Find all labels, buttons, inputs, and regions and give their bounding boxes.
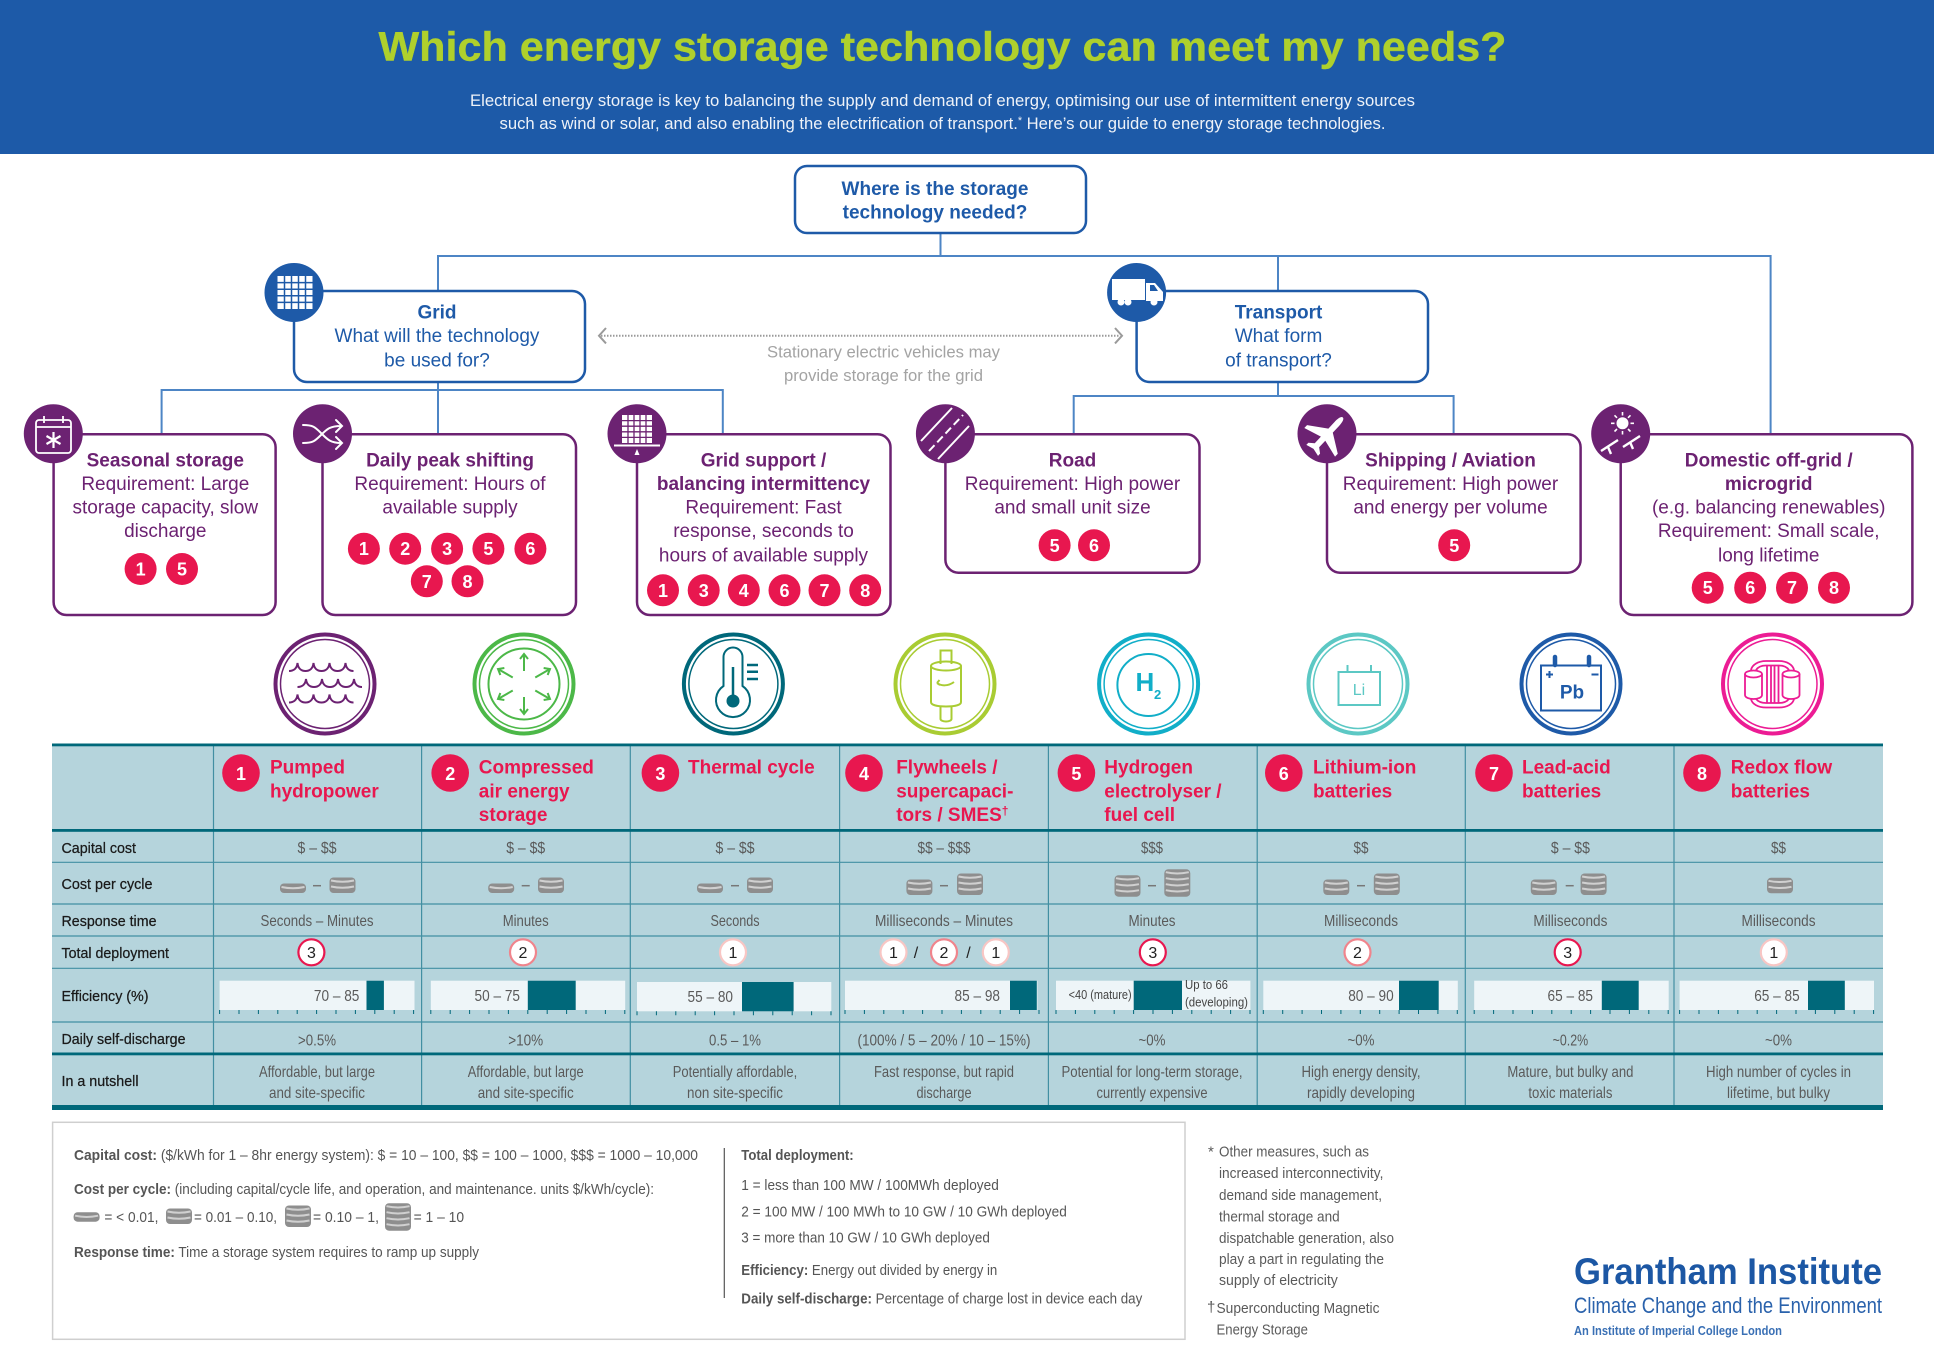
logo: Grantham Institute: Grantham Institute (1574, 1251, 1882, 1292)
row: total deployment: 2 (940, 945, 949, 962)
icon: compressed air arrows (474, 634, 574, 734)
row: in a nutshell: toxic materials (1528, 1085, 1612, 1102)
column headers: Lithium-ion (1313, 758, 1416, 778)
technology badges (1039, 529, 1110, 561)
note: stationary vehicles: Stationary electric vehicles may (767, 342, 1000, 362)
panel: grid question (264, 263, 585, 382)
technology badges: 1 (359, 539, 369, 559)
panel: daily peak shifting: Requirement: Hours of (354, 474, 546, 495)
icon: calendar snowflake (24, 404, 83, 463)
panel: grid support: Requirement: Fast (685, 498, 842, 518)
technology badges (348, 533, 546, 597)
panel: legend (53, 1122, 1185, 1339)
row labels: Cost per cycle (62, 876, 152, 893)
row: in a nutshell: Fast response, but rapid (874, 1064, 1014, 1081)
row: total deployment: / (914, 945, 919, 962)
row labels: Daily self-discharge (62, 1031, 186, 1048)
technology badge: 5 (1449, 536, 1459, 556)
row: efficiency bars: 65 – 85 (1754, 988, 1800, 1005)
row: in a nutshell: lifetime, but bulky (1727, 1085, 1830, 1102)
panel: shipping and aviation: Shipping / Aviation (1365, 450, 1536, 472)
column headers: tors / SMES (896, 805, 1002, 826)
row: capital cost: $ – $$ (298, 840, 337, 857)
panel: road: Road (1049, 450, 1096, 472)
panel: grid support: response, seconds to (673, 521, 854, 542)
row: daily self-discharge: (100% / 5 – 20% / 10 – 15%) (858, 1032, 1030, 1050)
panel: road: and small unit size (994, 498, 1151, 518)
footnotes (1207, 1144, 1394, 1338)
row: response time: Seconds – Minutes (260, 913, 374, 930)
footnotes: dispatchable generation, also (1219, 1230, 1394, 1247)
row: capital cost: $$ (1771, 840, 1786, 857)
column headers: batteries (1522, 782, 1601, 802)
legend: coin scale: = 1 – 10 (414, 1209, 464, 1226)
technology badges: 8 (462, 572, 473, 592)
column headers: Compressed (479, 758, 594, 778)
legend: coin scale: = 0.01 – 0.10, (194, 1209, 277, 1226)
row: in a nutshell: Mature, but bulky and (1507, 1064, 1633, 1081)
technology badges: 4 (739, 581, 749, 601)
legend: total deployment (741, 1147, 1067, 1247)
row labels: Capital cost (62, 840, 137, 857)
column headers: 3 (655, 764, 665, 784)
legend: total deployment: 2 = 100 MW / 100 MWh to 10 GW / 10 GWh deployed (741, 1204, 1067, 1221)
row: in a nutshell: currently expensive (1096, 1085, 1208, 1102)
legend: coin scale: = 0.10 – 1, (313, 1209, 379, 1226)
row: daily self-discharge: >10% (508, 1032, 543, 1050)
row: in a nutshell (259, 1064, 1851, 1102)
panel: road (916, 404, 1200, 573)
row: in a nutshell: Potential for long-term storage, (1062, 1064, 1242, 1081)
row: efficiency bars: Up to 66 (1185, 978, 1228, 992)
column headers: Lead-acid (1522, 758, 1611, 778)
column headers: hydropower (270, 782, 379, 802)
row: response time: Milliseconds – Minutes (875, 913, 1013, 930)
row: capital cost: $ – $$ (1551, 840, 1590, 857)
column headers: 1 (236, 764, 246, 784)
icon: pumped hydropower waves (276, 634, 374, 734)
panel: seasonal storage (24, 404, 276, 615)
icon: thermal thermometer (684, 634, 783, 734)
row: efficiency bars: 50 – 75 (474, 988, 520, 1005)
footnotes: Other measures, such as (1219, 1144, 1369, 1160)
column headers: 7 (1489, 764, 1499, 784)
logo: Grantham Institute: An Institute of Imperial College London (1574, 1324, 1782, 1338)
row: capital cost (298, 840, 1786, 857)
legend: total deployment: Total deployment: (741, 1147, 854, 1164)
icon: hydrogen: H (1136, 667, 1154, 697)
column headers: Redox flow (1731, 758, 1832, 778)
technology badges: 2 (400, 539, 410, 559)
column headers (222, 754, 1832, 826)
column headers: air energy (479, 782, 570, 802)
row: in a nutshell: rapidly developing (1307, 1085, 1415, 1102)
column headers: Pumped (270, 758, 345, 778)
footnotes: play a part in regulating the (1219, 1251, 1384, 1268)
row: in a nutshell: discharge (916, 1085, 972, 1102)
arrow: stationary electric vehicles (599, 328, 1122, 385)
icon: sun and solar panels (1591, 404, 1650, 463)
panel: seasonal storage: Seasonal storage (87, 450, 244, 472)
legend: daily self-discharge: Daily self-discharge: Percentage of charge lost in device each day (741, 1290, 1143, 1307)
note: stationary vehicles: provide storage for the grid (784, 366, 983, 385)
intro text: Here’s our guide to energy storage technologies. (1022, 114, 1386, 133)
technology badges: 3 (699, 581, 709, 601)
connector lines (162, 233, 1771, 434)
row: total deployment: 1 (991, 945, 1000, 962)
panel: grid support: hours of available supply (659, 546, 869, 566)
row: total deployment: 1 (729, 945, 738, 962)
technology badges: 7 (819, 581, 830, 601)
row: total deployment: 2 (519, 945, 528, 962)
row: capital cost: $$ (1354, 840, 1369, 857)
panel: domestic off-grid: Requirement: Small scale, (1658, 521, 1880, 542)
row: efficiency bars: 80 – 90 (1348, 988, 1394, 1005)
logo: Grantham Institute (1574, 1251, 1882, 1338)
row: total deployment (298, 939, 1787, 965)
comparison table (52, 744, 1883, 1110)
row: efficiency bars: 85 – 98 (954, 988, 1000, 1005)
row labels: Response time (62, 913, 156, 930)
technology badges: 5 (483, 539, 493, 559)
technology badges: 6 (779, 581, 790, 601)
icon: flywheel (896, 634, 994, 734)
panel: domestic off-grid: microgrid (1725, 474, 1813, 495)
column headers: 8 (1697, 764, 1707, 784)
technology badges: 6 (525, 539, 535, 559)
row labels (62, 840, 186, 1090)
column headers: electrolyser / (1104, 782, 1222, 802)
row: in a nutshell: Affordable, but large (259, 1064, 375, 1081)
technology badges (647, 574, 881, 606)
icon: hydrogen (1099, 634, 1198, 734)
row: capital cost: $$ – $$$ (918, 840, 971, 857)
row: total deployment: 3 (307, 945, 316, 962)
technology badges: 5 (177, 560, 187, 580)
icon: hydrogen: 2 (1154, 687, 1161, 702)
technology badges: 1 (658, 581, 668, 601)
panel: domestic off-grid: Domestic off-grid / (1685, 450, 1853, 472)
row labels: Total deployment (62, 945, 170, 962)
technology badges: 1 (136, 560, 146, 580)
column headers: storage (479, 805, 547, 826)
column headers: † (1002, 804, 1008, 818)
panel: seasonal storage: storage capacity, slow (73, 498, 258, 518)
intro text: Electrical energy storage is key to balancing the supply and demand of energy, optimising our use of intermittent energy sources (470, 91, 1415, 110)
panel: shipping and aviation: Requirement: High power (1343, 474, 1559, 495)
row: in a nutshell: non site-specific (687, 1085, 783, 1102)
column headers: 6 (1279, 764, 1289, 784)
technology badges: 7 (422, 572, 432, 592)
panel: grid support: balancing intermittency (657, 474, 871, 495)
intro text: * (1018, 115, 1023, 127)
row: daily self-discharge: ~0.2% (1553, 1032, 1588, 1050)
column headers: 2 (445, 764, 455, 784)
note: stationary vehicles (767, 342, 1000, 385)
technology badges: 8 (1829, 578, 1839, 598)
row: daily self-discharge: 0.5 – 1% (709, 1032, 761, 1050)
panel: transport question: What form (1235, 326, 1322, 347)
row: total deployment: 3 (1148, 945, 1157, 962)
footnotes: thermal storage and (1219, 1208, 1340, 1226)
footnotes: * (1208, 1144, 1214, 1160)
column headers: batteries (1313, 782, 1392, 802)
row: efficiency bars: 70 – 85 (314, 988, 359, 1005)
row: response time (260, 913, 1816, 930)
row: efficiency bars (220, 978, 1874, 1015)
row: daily self-discharge (298, 1032, 1792, 1050)
panel: domestic off-grid: (e.g. balancing renewables) (1652, 498, 1885, 518)
footnotes: increased interconnectivity, (1219, 1165, 1383, 1182)
row: response time: Minutes (1128, 913, 1176, 930)
legend: coin scale (74, 1203, 464, 1231)
technology badge (1438, 529, 1470, 561)
row: efficiency bars: <40 (mature) (1069, 988, 1132, 1002)
column headers: Thermal cycle (688, 758, 815, 778)
row: total deployment: 3 (1563, 945, 1572, 962)
panel: seasonal storage: Requirement: Large (81, 474, 249, 495)
row: in a nutshell: High number of cycles in (1706, 1064, 1851, 1081)
icon: lithium-ion battery: Li (1353, 682, 1365, 699)
panel: transport question: Transport (1235, 302, 1323, 324)
logo: Grantham Institute: Climate Change and the Environment (1574, 1293, 1882, 1318)
icon: grid (264, 263, 324, 322)
technology badges (1692, 572, 1850, 604)
legend: efficiency: Efficiency: Energy out divided by energy in (741, 1262, 997, 1279)
technology badges: 7 (1787, 578, 1797, 598)
technology badges: 8 (860, 581, 870, 601)
row labels: In a nutshell (62, 1073, 138, 1090)
row: response time: Minutes (503, 913, 549, 930)
row: efficiency bars: 55 – 80 (688, 989, 733, 1006)
row: in a nutshell: and site-specific (269, 1085, 365, 1102)
legend: capital cost: Capital cost: ($/kWh for 1 – 8hr energy system): $ = 10 – 100, $$ = 100 – 1000, $$$ = 1000 – 10,000 (74, 1147, 698, 1164)
panel: seasonal storage: discharge (124, 521, 206, 542)
technology badges (125, 553, 198, 585)
icon: lithium-ion battery (1308, 634, 1408, 734)
row: response time: Milliseconds (1324, 913, 1398, 930)
technology badges: 5 (1703, 578, 1713, 598)
panel: daily peak shifting: available supply (382, 498, 518, 518)
icon: lead-acid battery: Pb (1560, 682, 1584, 704)
technology badges: 3 (442, 539, 452, 559)
icon: lead-acid battery (1522, 634, 1620, 734)
row: daily self-discharge: ~0% (1765, 1032, 1792, 1050)
icon: redox flow (1723, 634, 1822, 734)
row: in a nutshell: High energy density, (1302, 1064, 1420, 1081)
row: capital cost: $ – $$ (716, 840, 755, 857)
question box: where needed: technology needed? (843, 202, 1027, 224)
panel: transport question: of transport? (1225, 350, 1332, 372)
panel: grid question: What will the technology (335, 326, 540, 347)
footnotes: † (1207, 1299, 1215, 1316)
footnotes: Energy Storage (1216, 1322, 1308, 1338)
column headers: 4 (859, 764, 869, 784)
legend: total deployment: 3 = more than 10 GW / 10 GWh deployed (741, 1230, 990, 1247)
question box: where needed: Where is the storage (842, 179, 1028, 200)
column headers: fuel cell (1104, 805, 1175, 826)
panel: grid question: Grid (417, 302, 457, 324)
row: response time: Milliseconds (1533, 913, 1607, 930)
row: efficiency bars: 65 – 85 (1548, 988, 1593, 1005)
row: capital cost: $$$ (1141, 840, 1163, 857)
panel: domestic off-grid: long lifetime (1718, 546, 1819, 566)
column headers: supercapaci- (896, 782, 1013, 802)
row: efficiency bars: (developing) (1185, 996, 1248, 1010)
row: total deployment: 2 (1353, 945, 1362, 962)
technology badges: 5 (1050, 536, 1060, 556)
column headers: batteries (1731, 782, 1810, 802)
intro text (470, 91, 1415, 133)
footnotes: demand side management, (1219, 1187, 1382, 1204)
panel: grid support: Grid support / (701, 450, 827, 472)
icon: road (916, 404, 975, 463)
title: Which energy storage technology can meet my needs? (378, 24, 1506, 70)
row: total deployment: / (966, 945, 971, 962)
column headers: Hydrogen (1104, 758, 1193, 778)
technology badges: 6 (1745, 578, 1755, 598)
panel: road: Requirement: High power (965, 474, 1181, 495)
technology badges: 6 (1089, 536, 1099, 556)
panel: grid support (608, 404, 890, 615)
panel: domestic off-grid (1591, 404, 1912, 615)
row: daily self-discharge: >0.5% (298, 1032, 336, 1050)
column headers: Flywheels / (896, 758, 998, 778)
header banner (0, 0, 1934, 154)
icon: plane (1297, 403, 1358, 465)
footnotes: supply of electricity (1219, 1272, 1338, 1289)
column headers: 5 (1071, 764, 1081, 784)
panel: shipping and aviation (1297, 403, 1581, 573)
row: daily self-discharge: ~0% (1348, 1032, 1374, 1050)
row: capital cost: $ – $$ (506, 840, 545, 857)
panel: grid question: be used for? (384, 350, 490, 372)
row: in a nutshell: and site-specific (478, 1085, 574, 1102)
row: total deployment: 1 (1769, 945, 1778, 962)
legend: cost per cycle: Cost per cycle: (including capital/cycle life, and operation, and maintenance. units $/kWh/cycle): (74, 1181, 654, 1198)
panel: transport question (1107, 263, 1428, 382)
icon: grid with stand (608, 404, 666, 463)
legend: response time: Response time: Time a storage system requires to ramp up supply (74, 1244, 479, 1261)
legend: coin scale: = < 0.01, (104, 1209, 158, 1226)
icon: truck (1107, 263, 1166, 322)
row: cost per cycle coins (280, 869, 1793, 897)
icon: shuffle arrows (293, 404, 352, 463)
footnotes: Superconducting Magnetic (1216, 1300, 1380, 1317)
row: response time: Seconds (710, 913, 760, 930)
panel: shipping and aviation: and energy per volume (1353, 498, 1548, 518)
panel: daily peak shifting (293, 404, 576, 615)
row: total deployment: 1 (889, 945, 898, 962)
row: in a nutshell: Potentially affordable, (673, 1064, 797, 1081)
panel: daily peak shifting: Daily peak shifting (366, 450, 534, 472)
question box: where needed (795, 166, 1086, 233)
row: in a nutshell: Affordable, but large (468, 1064, 584, 1081)
legend: total deployment: 1 = less than 100 MW / 100MWh deployed (741, 1177, 999, 1194)
row: daily self-discharge: ~0% (1138, 1032, 1166, 1050)
row labels: Efficiency (%) (62, 988, 148, 1005)
intro text: such as wind or solar, and also enabling the electrification of transport. (500, 114, 1029, 133)
row: response time: Milliseconds (1742, 913, 1816, 930)
